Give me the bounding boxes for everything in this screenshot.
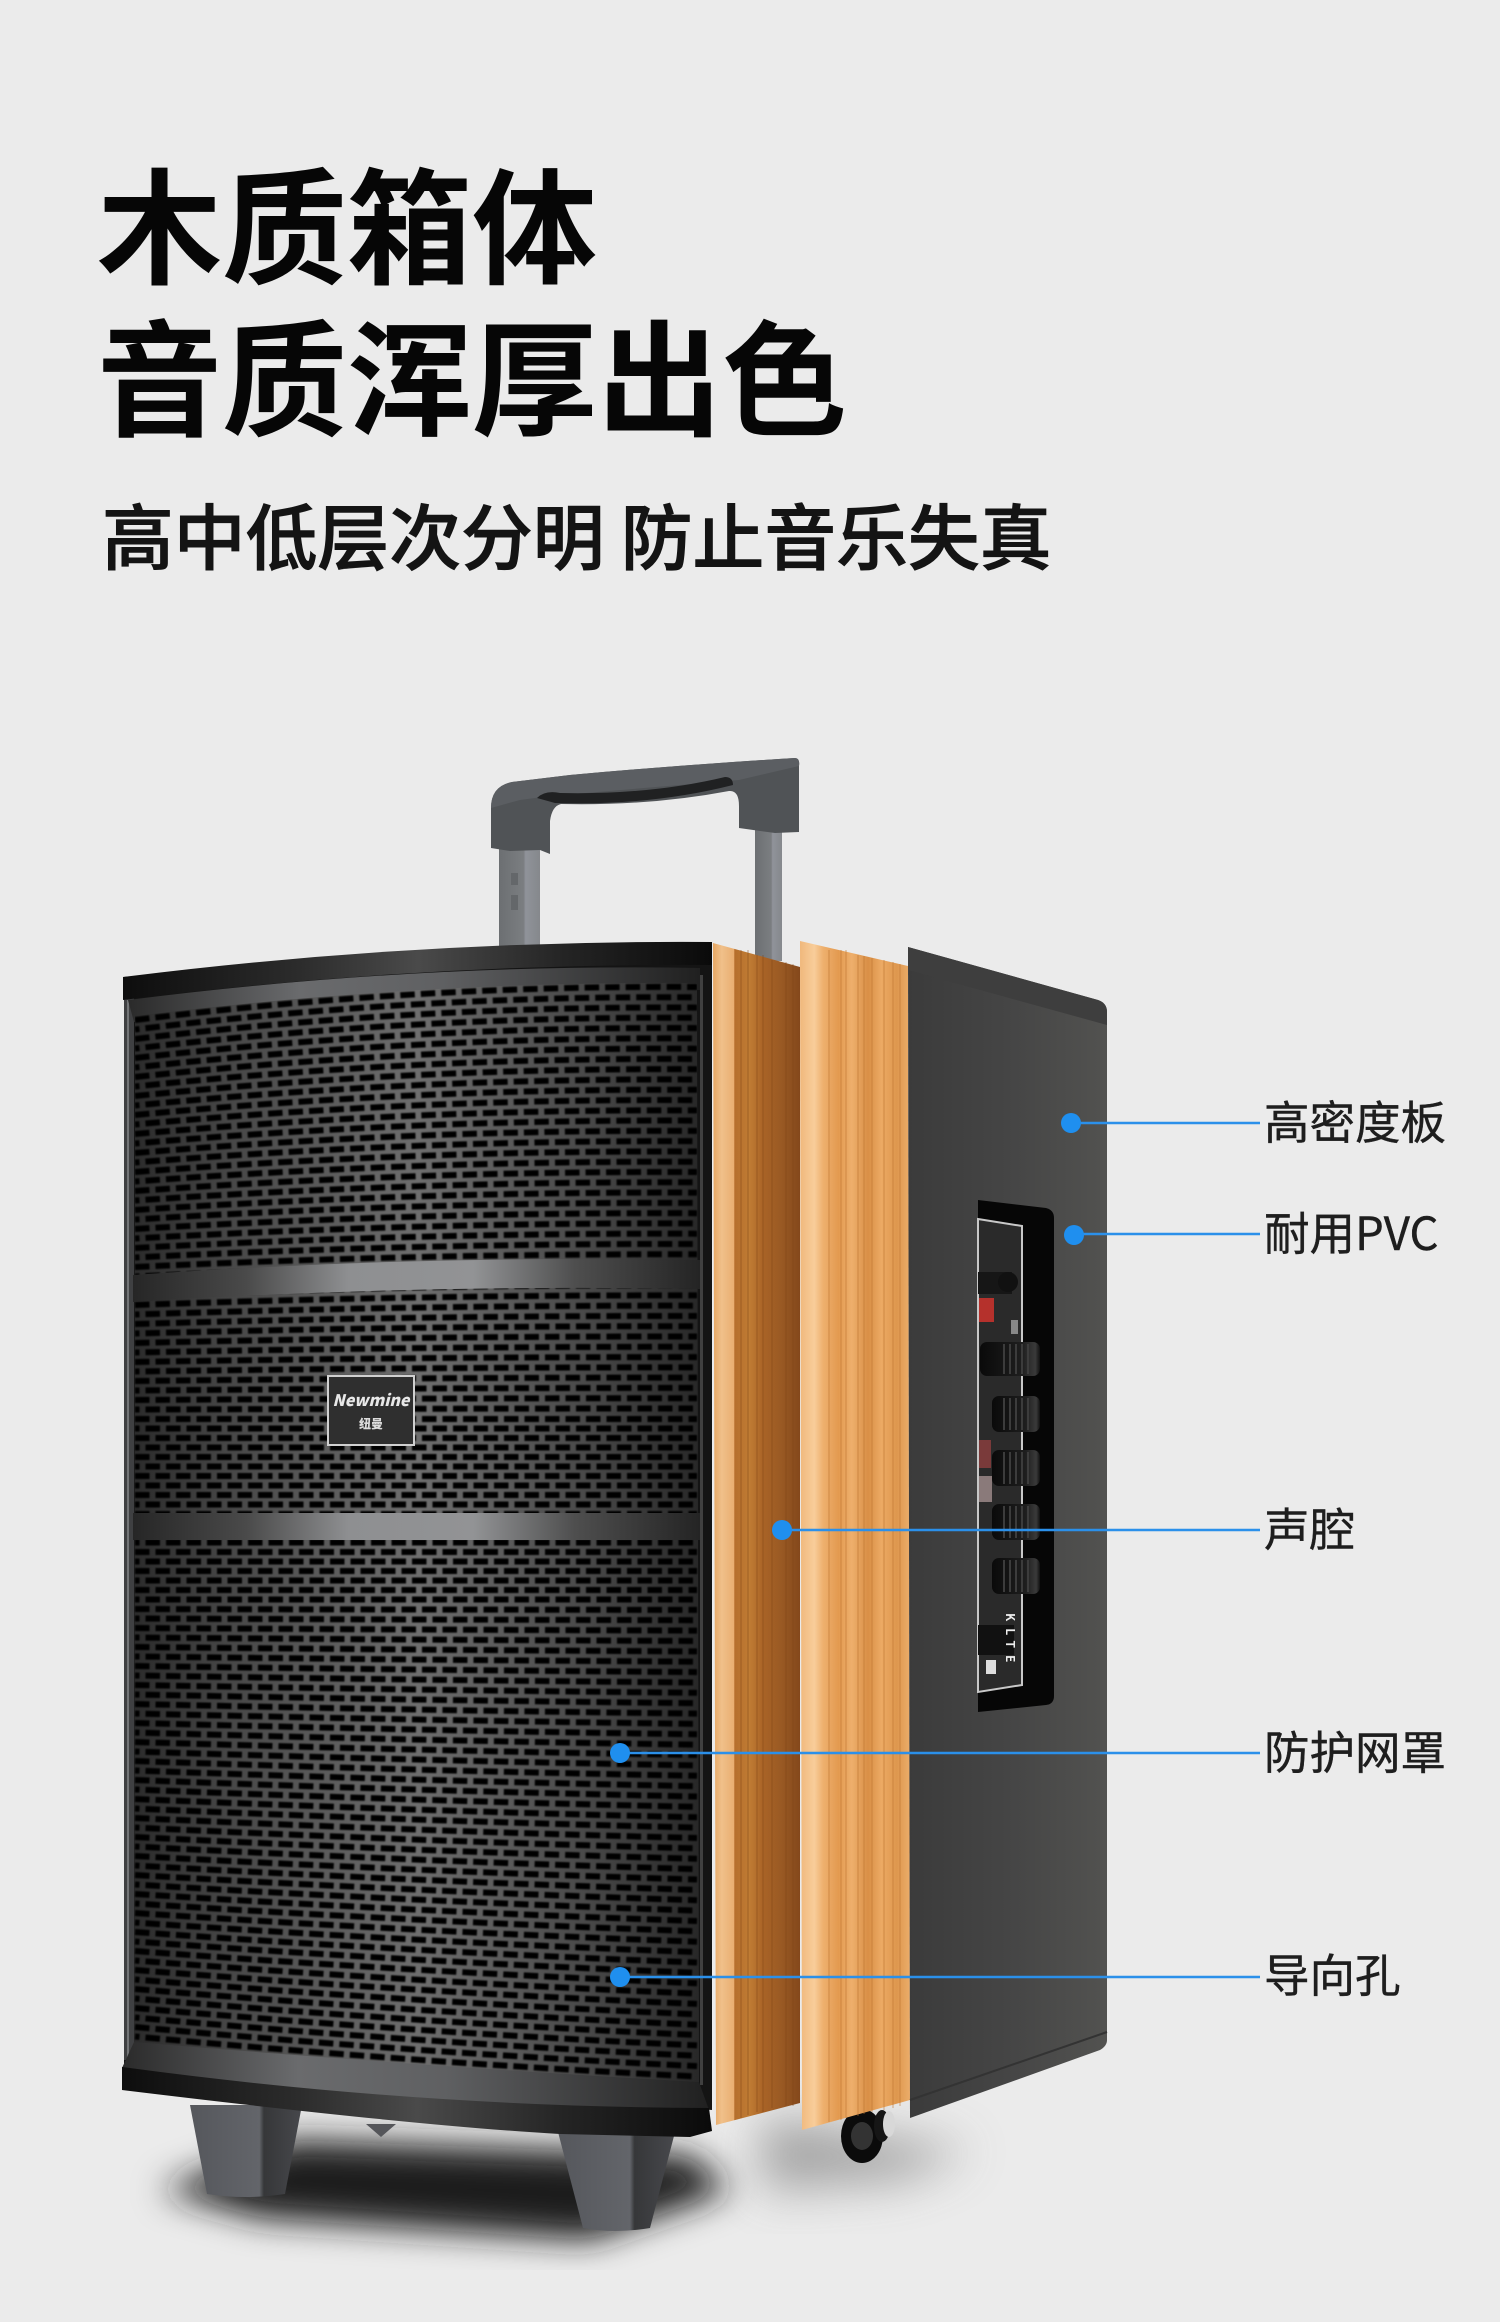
rear wheel bbox=[841, 2109, 895, 2163]
control panel bbox=[978, 1200, 1054, 1712]
title: 木质箱体 bbox=[97, 129, 597, 310]
callout: high density board bbox=[1061, 1087, 1446, 1153]
floor shadow bbox=[160, 2117, 972, 2240]
label strip: KLTE bbox=[1002, 1613, 1019, 1669]
right pole bbox=[755, 826, 782, 961]
wood panel: front board bbox=[800, 941, 910, 2130]
callout: guide hole bbox=[610, 1940, 1401, 2006]
title: 音质浑厚出色 bbox=[97, 281, 847, 462]
callout: durable PVC: 耐用PVC bbox=[1264, 1198, 1438, 1264]
callout: durable PVC bbox=[1064, 1198, 1438, 1264]
callout: high density board: 高密度板 bbox=[1264, 1087, 1446, 1153]
knobs bbox=[980, 1342, 1040, 1594]
bottom cap bbox=[122, 2067, 712, 2137]
speaker front body bbox=[122, 942, 712, 2137]
callout: protective grille bbox=[610, 1717, 1446, 1783]
trolley handle bbox=[491, 758, 799, 961]
lower band bbox=[133, 1513, 700, 1540]
label strip bbox=[978, 1440, 1019, 1674]
bottom bezel bbox=[122, 2042, 709, 2112]
subtitle: 高中低层次分明 防止音乐失真 bbox=[102, 481, 1052, 585]
upper band bbox=[133, 1259, 700, 1302]
grille mesh bbox=[130, 975, 705, 2090]
side panel: high density board bbox=[908, 947, 1107, 2118]
callout: sound cavity bbox=[772, 1494, 1355, 1560]
top bezel bbox=[128, 967, 700, 1022]
grip bbox=[491, 758, 799, 854]
indicator and switch bbox=[978, 1272, 1018, 1334]
left pole bbox=[499, 846, 540, 946]
logo plate: 纽曼 bbox=[359, 1415, 383, 1432]
callout: protective grille: 防护网罩 bbox=[1264, 1717, 1446, 1783]
top cap bbox=[123, 942, 712, 1000]
title bbox=[97, 129, 847, 462]
logo plate bbox=[328, 1376, 414, 1445]
frame bbox=[124, 945, 712, 2110]
logo plate: Newmine bbox=[333, 1387, 411, 1411]
callout: sound cavity: 声腔 bbox=[1264, 1494, 1355, 1560]
callout: guide hole: 导向孔 bbox=[1264, 1940, 1401, 2006]
front feet bbox=[190, 2105, 674, 2231]
wood panel: sound cavity bbox=[713, 943, 800, 2125]
